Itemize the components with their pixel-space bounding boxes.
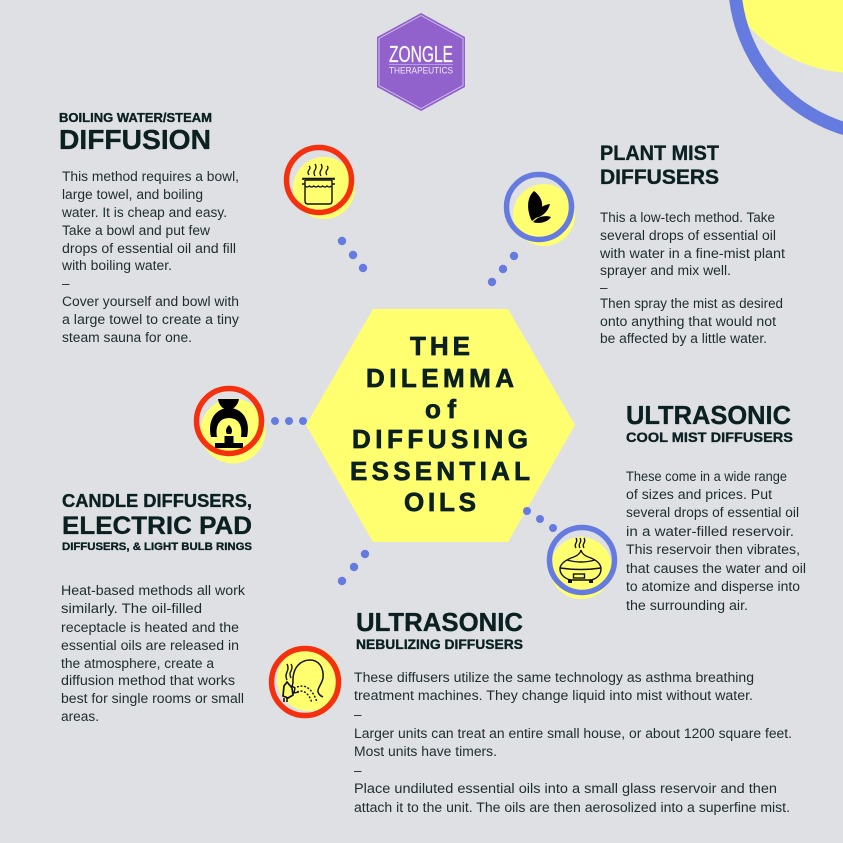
text block: plant mist method: several drops of essential oil <box>600 228 776 243</box>
icon: ultrasonic mist diffuser <box>550 528 614 599</box>
central hexagon with title: DILEMMA <box>366 363 514 393</box>
text block: plant mist method: with water in a fine-mist plant <box>599 246 785 261</box>
text block: cool mist method: These come in a wide range <box>626 469 787 484</box>
icon: boiling pot <box>286 148 355 219</box>
heading: boiling water steam diffusion: DIFFUSION <box>59 124 211 155</box>
dotted connector: boiling water <box>338 237 367 272</box>
text block: cool mist method: in a water-filled reservoir. <box>626 524 794 539</box>
text block: heat-based methods: areas. <box>61 709 99 724</box>
text block: nebulizer method: – <box>354 707 362 722</box>
central hexagon with title: ESSENTIAL <box>350 456 530 486</box>
text block: boiling water method: Take a bowl and put few <box>62 223 210 238</box>
dotted connector: plant mist <box>488 252 518 286</box>
text block: nebulizer method: – <box>354 763 362 778</box>
text block: cool mist method: of sizes and prices. Put <box>626 487 772 502</box>
text block: nebulizer method: treatment machines. They change liquid into mist without water. <box>354 688 753 703</box>
text block: cool mist method <box>626 469 806 613</box>
text block: nebulizer method: attach it to the unit. The oils are then aerosolized into a superfine mist. <box>354 800 790 815</box>
text block: plant mist method: be affected by a little water. <box>600 331 767 346</box>
text block: heat-based methods <box>61 583 245 724</box>
heading: ultrasonic nebulizing: ULTRASONIC <box>356 607 523 637</box>
text block: heat-based methods: receptacle is heated and the <box>61 620 239 635</box>
dotted connector: cool mist <box>523 507 557 532</box>
text block: boiling water method: steam sauna for one. <box>62 330 192 345</box>
heading: ultrasonic cool mist: ULTRASONIC <box>626 400 791 430</box>
text block: cool mist method: to atomize and disperse into <box>626 579 800 594</box>
heading: candle diffusers: ELECTRIC PAD <box>62 512 252 540</box>
dotted connector: candle <box>271 417 307 425</box>
text block: cool mist method: the surrounding air. <box>626 598 748 613</box>
section: ultrasonic nebulizing diffusers <box>354 607 792 815</box>
text block: plant mist method: – <box>600 280 608 295</box>
heading: plant mist diffusers <box>600 142 719 189</box>
text block: nebulizer method: These diffusers utilize the same technology as asthma breathing <box>354 670 754 685</box>
text block: boiling water method: – <box>62 276 70 291</box>
heading: boiling water steam diffusion <box>59 110 212 155</box>
text block: nebulizer method <box>354 670 792 815</box>
text block: heat-based methods: best for single rooms or small <box>61 691 244 706</box>
text block: plant mist method <box>599 210 785 346</box>
central hexagon with title: DIFFUSING <box>352 424 528 454</box>
heading: candle diffusers <box>62 491 252 553</box>
text block: nebulizer method: Larger units can treat an entire small house, or about 1200 square feet. <box>354 726 792 741</box>
heading: ultrasonic nebulizing: NEBULIZING DIFFUSERS <box>356 636 523 652</box>
text block: cool mist method: This reservoir then vibrates, <box>626 542 800 557</box>
text block: boiling water method: a large towel to create a tiny <box>62 312 239 327</box>
logo: Zongle Therapeutics: ZONGLE <box>389 41 453 67</box>
text block: plant mist method: sprayer and mix well. <box>600 263 731 278</box>
logo: Zongle Therapeutics: THERAPEUTICS <box>389 66 453 76</box>
text block: boiling water method: This method requires a bowl, <box>62 169 239 184</box>
text block: nebulizer method: Place undiluted essential oils into a small glass reservoir and then <box>354 781 777 796</box>
text block: heat-based methods: the atmosphere, create a <box>61 656 214 671</box>
text block: boiling water method: large towel, and boiling <box>62 187 203 202</box>
section: plant mist diffusers <box>599 142 785 346</box>
heading: ultrasonic cool mist: COOL MIST DIFFUSERS <box>626 429 793 445</box>
text block: plant mist method: Then spray the mist as desired <box>600 296 783 311</box>
text block: cool mist method: several drops of essential oil <box>626 505 799 520</box>
heading: plant mist diffusers: DIFFUSERS <box>600 166 719 189</box>
heading: ultrasonic cool mist <box>626 400 793 445</box>
section: ultrasonic cool mist diffusers <box>626 400 806 613</box>
heading: ultrasonic nebulizing <box>356 607 523 652</box>
text block: cool mist method: that causes the water and oil <box>626 561 806 576</box>
central hexagon with title: THE <box>410 331 470 361</box>
heading: boiling water steam diffusion: BOILING WATER/STEAM <box>59 110 212 125</box>
heading: plant mist diffusers: PLANT MIST <box>600 142 719 165</box>
central hexagon with title <box>306 309 575 542</box>
heading: candle diffusers: CANDLE DIFFUSERS, <box>62 491 252 511</box>
corner decoration: yellow disc with blue ring <box>711 0 843 136</box>
logo: Zongle Therapeutics <box>377 13 465 111</box>
central hexagon with title: OILS <box>404 487 476 517</box>
text block: boiling water method: drops of essential oil and fill <box>62 241 236 256</box>
central hexagon with title: of <box>425 394 456 424</box>
text block: heat-based methods: Heat-based methods all work <box>61 583 245 598</box>
icon: head inhaling from a nebulizer <box>272 647 341 716</box>
text block: heat-based methods: similarly. The oil-filled <box>61 601 202 616</box>
text block: nebulizer method: Most units have timers. <box>354 744 497 759</box>
icon: candle diffuser <box>196 388 266 464</box>
text block: heat-based methods: essential oils are released in <box>61 638 239 653</box>
text block: boiling water method: Cover yourself and bowl with <box>62 294 239 309</box>
text block: boiling water method: water. It is cheap and easy. <box>61 205 227 220</box>
text block: plant mist method: This a low-tech method. Take <box>600 210 775 225</box>
dotted connector: nebulizing <box>338 550 369 585</box>
section: boiling water / steam diffusion <box>59 110 239 345</box>
text block: heat-based methods: diffusion method that works <box>61 673 235 688</box>
section: candle diffusers, electric pad <box>61 491 252 724</box>
text block: boiling water method <box>61 169 239 345</box>
heading: candle diffusers: DIFFUSERS, & LIGHT BULB RINGS <box>62 541 252 553</box>
text block: boiling water method: with boiling water. <box>61 258 172 273</box>
text block: plant mist method: onto anything that would not <box>600 314 776 329</box>
icon: plant leaves <box>506 174 575 246</box>
